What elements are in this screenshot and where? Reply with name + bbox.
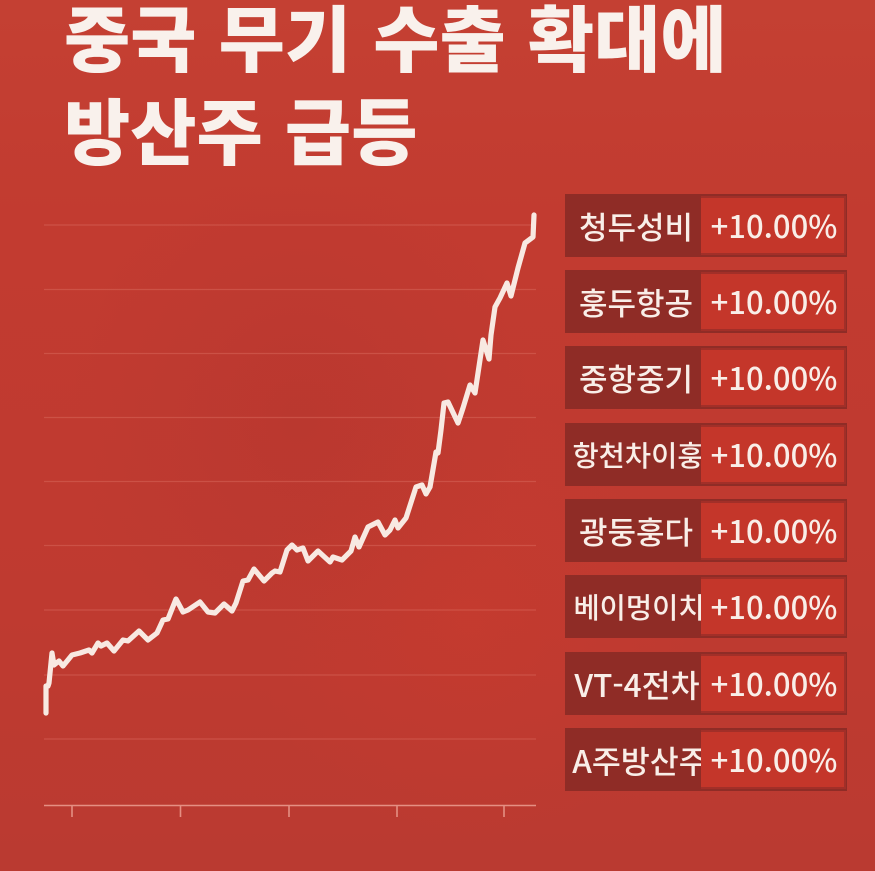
row: 청두성비 bbox=[565, 194, 847, 257]
row: 항천차이훙: +10.00% bbox=[711, 431, 837, 476]
row: 중항중기: +10.00% bbox=[711, 354, 837, 399]
row: 훙두항공: 훙두항공 bbox=[579, 279, 693, 324]
row: VT-4전차: +10.00% bbox=[711, 660, 837, 705]
row: 베이멍이치 bbox=[565, 575, 847, 638]
row: 항천차이훙: 항천차이훙 bbox=[572, 434, 704, 475]
title: 방산주 급등 bbox=[64, 75, 417, 180]
title bbox=[64, 0, 727, 180]
row: 광둥훙다: +10.00% bbox=[711, 507, 837, 552]
row: 광둥훙다 bbox=[565, 499, 847, 562]
row: 중항중기 bbox=[565, 346, 847, 409]
x axis bbox=[44, 805, 536, 817]
row: VT-4전차: VT-4전차 bbox=[574, 661, 700, 707]
row: 청두성비: 청두성비 bbox=[579, 203, 693, 248]
row: A주방산주: +10.00% bbox=[711, 736, 837, 781]
row: 베이멍이치: +10.00% bbox=[711, 583, 837, 628]
row: 훙두항공 bbox=[565, 270, 847, 333]
price line bbox=[46, 215, 534, 713]
row: 항천차이훙 bbox=[565, 423, 847, 486]
row: A주방산주 bbox=[565, 728, 847, 791]
row: 훙두항공: +10.00% bbox=[711, 278, 837, 323]
row: 중항중기: 중항중기 bbox=[579, 355, 693, 400]
row: 광둥훙다: 광둥훙다 bbox=[579, 508, 693, 553]
row: VT-4전차 bbox=[565, 652, 847, 715]
row: 베이멍이치: 베이멍이치 bbox=[573, 586, 705, 627]
row: 청두성비: +10.00% bbox=[711, 202, 837, 247]
row: A주방산주: A주방산주 bbox=[572, 737, 708, 783]
